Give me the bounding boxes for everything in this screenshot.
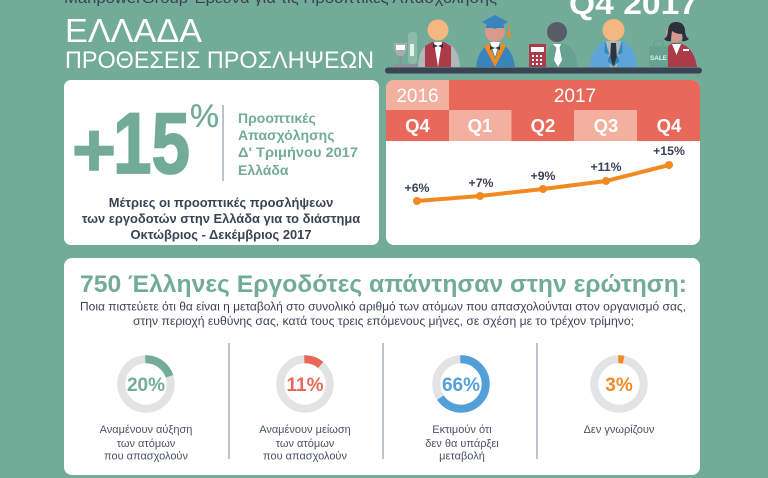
donut: 3% don't know [584, 359, 655, 436]
summary text: Μέτριες οι προοπτικές προσλήψεων [109, 195, 333, 210]
icon: wine glass and bottle [393, 32, 423, 67]
line chart: +11% [590, 160, 622, 174]
donut: 20% increase: που απασχολούν [104, 450, 188, 462]
line chart: +9% [531, 169, 556, 183]
title [65, 12, 374, 74]
quarter table header [386, 80, 700, 141]
quarter table header: 2016 [396, 86, 439, 107]
survey question: στην περιοχή ευθύνης σας, κατά τους τρεις επόμενους μήνες, σε σχέση με το τρέχον τρίμηνο; [133, 314, 634, 328]
outlook caption: Προοπτικές [238, 110, 316, 126]
donut: 20% increase: 20% [127, 375, 165, 396]
illustration: workers at counter [385, 15, 702, 74]
donut: 3% don't know: 3% [605, 375, 633, 396]
outlook caption: Ελλάδα [238, 162, 289, 178]
summary text [82, 195, 360, 242]
title: ΠΡΟΘΕΣΕΙΣ ΠΡΟΣΛΗΨΕΩΝ [65, 47, 374, 74]
donut: 3% don't know: Δεν γνωρίζουν [584, 424, 655, 436]
donut: 11% decrease: που απασχολούν [263, 450, 347, 462]
quarter table header: 2017 [554, 86, 596, 107]
donut: 20% increase: Αναμένουν αύξηση [100, 424, 192, 436]
donut: 11% decrease: Αναμένουν μείωση [259, 424, 351, 436]
icon: shop assistant with sale bag: SALE [650, 55, 668, 62]
summary text: των εργοδοτών στην Ελλάδα για το διάστημα [82, 211, 360, 226]
big number: % [190, 98, 219, 134]
donut: 11% decrease: των ατόμων [276, 438, 335, 450]
icon: shop assistant with sale bag [649, 22, 697, 67]
quarter table header: Q2 [531, 115, 555, 136]
big number [72, 96, 219, 193]
donut: 66% no change [425, 359, 499, 462]
panel: quarterly trend chart [386, 80, 700, 245]
icon: waiter [418, 20, 460, 67]
quarter table header: Q4 [657, 115, 682, 136]
donut: 20% increase [100, 359, 192, 462]
quarter table header: Q4 [405, 115, 431, 136]
donut: 66% no change: μεταβολή [439, 450, 485, 462]
donut: 20% increase: των ατόμων [117, 438, 176, 450]
survey question: Ποια πιστεύετε ότι θα είναι η μεταβολή στο συνολικό αριθμό των ατόμων που απασχολούνται στον οργανισμό σας, [80, 300, 686, 314]
title: ΕΛΛΑΔΑ [65, 12, 202, 49]
outlook caption [238, 110, 358, 178]
donut: 11% decrease [259, 359, 351, 462]
icon: calculator and accountant [529, 22, 577, 67]
donut: 11% decrease: 11% [287, 375, 324, 396]
quarter table header: Q3 [594, 115, 618, 136]
donut: 66% no change: Εκτιμούν ότι [432, 424, 492, 436]
line chart: +6% [405, 181, 430, 195]
line chart: +7% [469, 176, 494, 190]
donut: 66% no change: δεν θα υπάρξει [425, 438, 499, 450]
quarter table header: Q1 [468, 115, 492, 136]
icon: graduate [476, 15, 515, 67]
survey question [80, 300, 686, 328]
counter [385, 68, 702, 74]
big number: 15 [113, 96, 190, 192]
summary text: Οκτώβριος - Δεκέμβριος 2017 [130, 227, 312, 242]
big number: + [72, 108, 116, 193]
icon: business man [590, 19, 637, 67]
outlook caption: Απασχόλησης [238, 127, 334, 143]
panel: employer survey [64, 258, 700, 475]
line chart [405, 144, 685, 205]
donut: 66% no change: 66% [442, 375, 480, 396]
outlook caption: Δ' Τριμήνου 2017 [238, 144, 358, 160]
line chart: +15% [653, 144, 685, 158]
survey heading: 750 Έλληνες Εργοδότες απάντησαν στην ερώτηση: [80, 271, 687, 298]
panel: headline +15% [64, 80, 379, 245]
